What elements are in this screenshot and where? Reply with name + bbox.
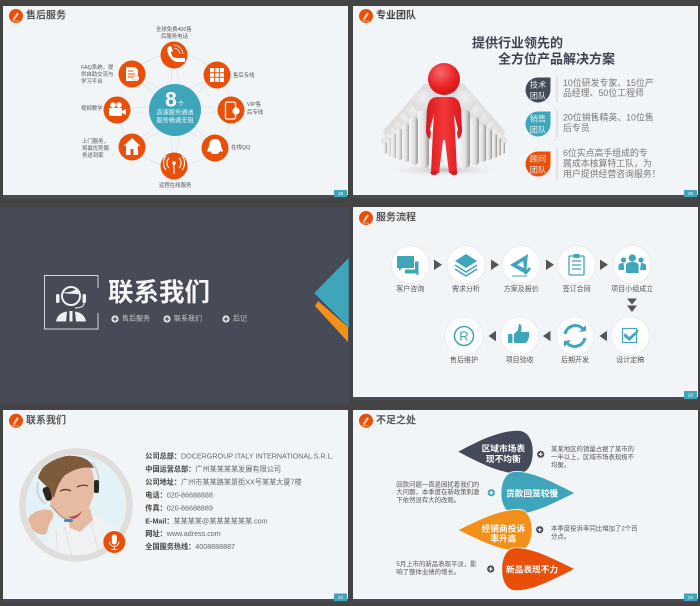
panel: 联系我们 section divider bbox=[0, 207, 349, 403]
text: 区域市场 note: 某某地区的销量占据了某市的 bbox=[551, 444, 634, 453]
petal: 经销商投诉率升高: 经销商投诉 bbox=[482, 522, 525, 533]
nav: 售后服务 bbox=[111, 314, 150, 323]
text: 销售团队 description: 后专员 bbox=[563, 122, 590, 133]
text: 新品 note: 响了整体业绩的增长。 bbox=[396, 567, 460, 576]
text: 回款 note: 大问题，本季度在新政策刺激 bbox=[396, 487, 480, 496]
nav: 售后服务: 售后服务 bbox=[122, 314, 150, 322]
icon: header logo bbox=[9, 414, 23, 428]
petal: 经销商投诉率升高: 率升高 bbox=[490, 532, 517, 543]
heading: 联系我们: 联系我们 bbox=[108, 279, 210, 307]
icon: plus dark bbox=[536, 526, 543, 533]
icon: grid bbox=[204, 62, 230, 88]
labels: service channels bbox=[81, 25, 264, 189]
text block: contact details bbox=[145, 452, 334, 551]
heading: 服务流程: 服务流程 bbox=[376, 210, 416, 224]
page number bbox=[684, 190, 697, 197]
step: 售后维护: 售后维护 bbox=[450, 355, 478, 364]
panel: 联系我们 contact bbox=[3, 410, 348, 602]
badge: 顾问团队 bbox=[526, 152, 550, 176]
labels: service channels: VIP售 bbox=[247, 100, 261, 108]
page number: 24 bbox=[688, 595, 693, 600]
icon: header logo bbox=[359, 414, 373, 428]
labels: service channels: 上门服务， bbox=[82, 137, 109, 145]
badge: 销售团队: 销售 bbox=[530, 114, 546, 124]
nav: 后记 bbox=[222, 314, 247, 323]
text block: contact details: 公司总部：DOCERGROUP ITALY INTERNATIONAL S.R.L. bbox=[145, 452, 334, 461]
arrow bbox=[600, 331, 607, 341]
page number: 23 bbox=[338, 595, 343, 600]
petal: 新品表现不力 bbox=[502, 548, 575, 591]
text: 投诉 note: 本季度投诉率同比增加了2个百 bbox=[551, 524, 638, 532]
icon: VIP phone bbox=[218, 96, 244, 124]
heading: 提供行业领先的 bbox=[472, 36, 615, 66]
icon: FAQ document bbox=[118, 60, 146, 88]
text: 技术团队 description: 品经理、50位工程师 bbox=[563, 87, 644, 98]
labels: service channels: 远程在线服务 bbox=[159, 181, 192, 189]
arrow bbox=[434, 260, 442, 270]
text block: contact details: 公司地址：广州市某某路某景街XX号某某大厦7楼 bbox=[145, 478, 302, 487]
panel: 专业团队 bbox=[353, 6, 698, 198]
center hub: 8个: 8 bbox=[165, 88, 177, 112]
step: 需求分析: 需求分析 bbox=[452, 284, 480, 293]
badge: 顾问团队: 顾问 bbox=[530, 154, 546, 164]
panel: 服务流程 bbox=[353, 207, 698, 400]
text block: contact details: E-Mail：某某某某@某某某某某某.com bbox=[145, 517, 268, 525]
step: 后期开发 bbox=[556, 317, 594, 364]
petal: 货款回笼较慢 bbox=[501, 471, 575, 514]
step: 项目验收: 项目验收 bbox=[506, 355, 534, 364]
badge: 技术团队: 团队 bbox=[530, 90, 546, 100]
page number bbox=[334, 594, 347, 601]
labels: service channels: 学习平台 bbox=[81, 77, 103, 85]
labels: service channels: 将最优势服 bbox=[82, 144, 110, 152]
petal: 新品表现不力: 新品表现不力 bbox=[506, 564, 558, 575]
badge: 销售团队: 团队 bbox=[530, 124, 546, 134]
icon: header logo bbox=[359, 9, 373, 23]
step: 项目小组成立: 项目小组成立 bbox=[611, 284, 653, 293]
center hub: 8个: 服务畅通无阻 bbox=[156, 116, 194, 124]
icon: video camera bbox=[104, 96, 130, 124]
page number: 19 bbox=[338, 191, 343, 196]
center hub: 8个: 个 bbox=[178, 101, 184, 108]
labels: service channels: 全球免费400售 bbox=[156, 25, 192, 33]
arrow bbox=[543, 331, 550, 341]
petal: 区域市场表现不均衡: 现不均衡 bbox=[486, 453, 521, 464]
arrow bbox=[488, 331, 496, 341]
step: 签订合同 bbox=[558, 246, 596, 293]
step: 后期开发: 后期开发 bbox=[561, 355, 589, 364]
nav: 联系我们: 联系我们 bbox=[174, 314, 202, 322]
text: 回款 note bbox=[396, 480, 480, 504]
illustration: red figure leading white crowd bbox=[381, 63, 507, 177]
petal: 经销商投诉率升高 bbox=[458, 509, 532, 551]
petal: 区域市场表现不均衡: 区域市场表 bbox=[482, 443, 525, 454]
arrow bbox=[491, 260, 499, 270]
heading: 联系我们: 联系我们 bbox=[26, 414, 66, 426]
text: 投诉 note bbox=[551, 524, 638, 540]
page number bbox=[684, 391, 697, 399]
page number: 22 bbox=[688, 392, 693, 398]
text: 销售团队 description bbox=[556, 110, 654, 137]
text: 区域市场 note bbox=[551, 444, 635, 469]
text: 投诉 note: 分点。 bbox=[551, 532, 570, 540]
labels: service channels: 供自助交流与 bbox=[81, 70, 113, 78]
center hub: 8个 bbox=[149, 84, 201, 136]
text: 顾问团队 description: 属成本核算特工队，为 bbox=[563, 158, 652, 168]
text block: contact details: 全国服务热线：4008888887 bbox=[145, 542, 235, 551]
step: 项目验收 bbox=[501, 317, 539, 364]
text: 新品 note bbox=[396, 559, 477, 576]
arrow: down double bbox=[627, 298, 637, 312]
step: 项目小组成立 bbox=[611, 246, 653, 293]
labels: service channels: 视频教学 bbox=[81, 104, 103, 112]
center hub: 8个: 高速服务通道 bbox=[156, 108, 194, 116]
icon: QQ bbox=[202, 134, 228, 162]
text: 区域市场 note: 一半以上，区域市场表现极不 bbox=[551, 452, 635, 461]
text block: contact details: 电话：020-86688888 bbox=[145, 490, 213, 499]
text: 新品 note: 5月上市的新品表现平淡，影 bbox=[396, 559, 477, 568]
network lines bbox=[117, 54, 231, 166]
icon: plus dark bbox=[537, 451, 544, 458]
petal: 区域市场表现不均衡 bbox=[458, 431, 533, 473]
labels: service channels: 在线QQ bbox=[231, 143, 250, 151]
heading: 提供行业领先的: 提供行业领先的 bbox=[472, 36, 563, 50]
portrait: headset operator bbox=[20, 450, 132, 562]
arrow bbox=[546, 260, 554, 270]
panel: 不足之处 bbox=[353, 410, 698, 602]
icon: plus dark bbox=[487, 565, 494, 573]
icon: header logo bbox=[359, 211, 373, 225]
text: 顾问团队 description: 6位实点高手组成的专 bbox=[563, 147, 648, 158]
text: 区域市场 note: 均衡。 bbox=[551, 460, 570, 469]
step: 售后维护: R bbox=[459, 328, 469, 344]
icon: phone 400 bbox=[160, 42, 188, 68]
icon: support agent in frame bbox=[44, 276, 98, 329]
decoration: orange and teal triangles bbox=[314, 258, 348, 342]
step: 客户咨询: 客户咨询 bbox=[396, 284, 424, 293]
heading: 不足之处: 不足之处 bbox=[376, 414, 416, 426]
labels: service channels: 售后专线 bbox=[233, 71, 255, 79]
arrow bbox=[600, 260, 608, 270]
step: 设计定稿 bbox=[611, 317, 649, 364]
text: 回款 note: 下依然没有大的改观。 bbox=[396, 495, 460, 504]
labels: service channels: 务送到家 bbox=[82, 151, 104, 159]
petal: 货款回笼较慢: 货款回笼较慢 bbox=[506, 487, 558, 498]
nav: 后记: 后记 bbox=[233, 314, 247, 322]
page number bbox=[684, 594, 697, 601]
icon: plus teal bbox=[488, 489, 495, 496]
labels: service channels: 后服务电话 bbox=[161, 32, 189, 40]
step: 设计定稿: 设计定稿 bbox=[616, 355, 644, 364]
step: 客户咨询 bbox=[391, 246, 429, 293]
text: 技术团队 description: 10位研发专家、15位产 bbox=[563, 77, 654, 88]
badge: 销售团队 bbox=[526, 112, 550, 136]
badge: 技术团队: 技术 bbox=[530, 80, 546, 90]
text block: contact details: 网址：www.adress.com bbox=[145, 529, 221, 538]
heading: 专业团队: 专业团队 bbox=[376, 8, 416, 22]
step: 方案及报价: 方案及报价 bbox=[504, 284, 539, 293]
icon: house bbox=[118, 134, 146, 160]
text: 顾问团队 description bbox=[556, 147, 661, 180]
icon: header logo bbox=[9, 9, 23, 23]
step: 方案及报价 bbox=[502, 246, 540, 293]
page number bbox=[334, 190, 347, 197]
labels: service channels: 后专线 bbox=[247, 108, 264, 116]
text: 回款 note: 回款问题一直是困扰着我们的 bbox=[396, 480, 479, 488]
heading: 售后服务: 售后服务 bbox=[26, 8, 66, 22]
step: 需求分析 bbox=[447, 246, 485, 293]
text: 顾问团队 description: 用户提供经营咨询服务！ bbox=[563, 168, 661, 179]
text block: contact details: 中国运营总部：广州某某某某发展有限公司 bbox=[145, 465, 281, 474]
heading: 提供行业领先的: 全方位产品解决方案 bbox=[498, 52, 615, 66]
icon: microphone badge bbox=[103, 531, 125, 553]
text: 销售团队 description: 20位销售精英、10位售 bbox=[563, 112, 654, 122]
nav: 联系我们 bbox=[163, 314, 202, 323]
badge: 顾问团队: 团队 bbox=[530, 164, 546, 174]
text block: contact details: 传真：020-86688889 bbox=[145, 503, 213, 512]
panel: 售后服务 bbox=[3, 6, 348, 198]
badge: 技术团队 bbox=[526, 78, 550, 102]
step: 售后维护 bbox=[445, 317, 483, 364]
text: 技术团队 description bbox=[556, 76, 654, 102]
icon: signal tower bbox=[160, 152, 188, 180]
labels: service channels: FAQ系统，提 bbox=[81, 63, 114, 71]
page number: 20 bbox=[688, 191, 693, 196]
step: 签订合同: 签订合同 bbox=[563, 284, 591, 293]
